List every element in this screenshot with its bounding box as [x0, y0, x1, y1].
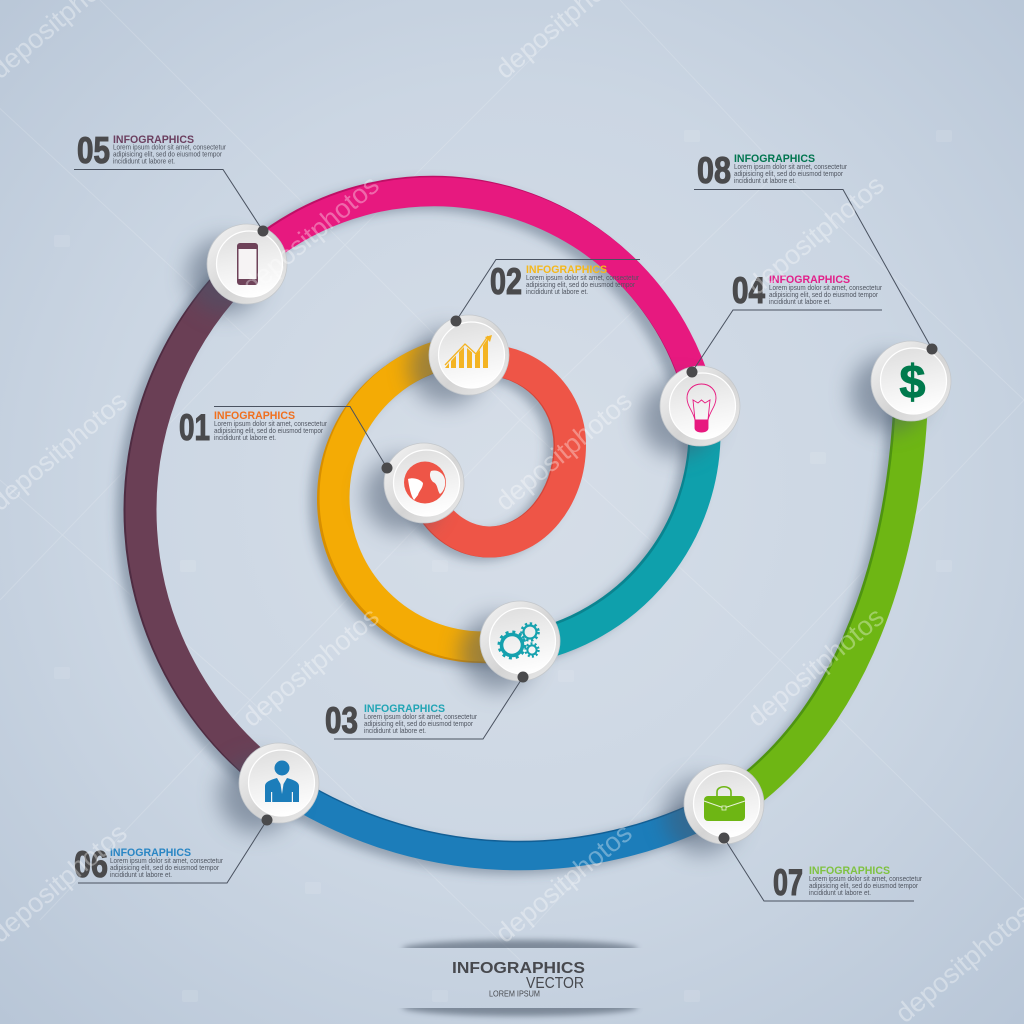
number 08: 08 [697, 150, 731, 191]
body 04: incididunt ut labore et. [769, 297, 831, 306]
number 07: 07 [773, 862, 803, 903]
node 05: phone [187, 224, 287, 314]
body 08: Lorem ipsum dolor sit amet, consectetur [734, 162, 847, 171]
label 07 [773, 862, 922, 903]
body 05: incididunt ut labore et. [113, 156, 175, 166]
body 08 [734, 162, 847, 185]
watermark: depositphotos [237, 602, 385, 733]
icon: businessman [265, 760, 299, 802]
footer shadow top [400, 936, 640, 948]
footer shadow bottom [400, 1008, 640, 1020]
label 06 [74, 844, 223, 885]
number 02: 02 [490, 261, 522, 302]
node 02: chart [409, 315, 509, 405]
watermark: depositphotos [742, 602, 890, 733]
body 06 [110, 856, 223, 879]
icon: briefcase [704, 787, 745, 821]
node 04: bulb [640, 366, 740, 456]
body 06: incididunt ut labore et. [110, 870, 172, 879]
leader lines [74, 170, 932, 901]
body 06: adipisicing elit, sed do eiusmod tempor [110, 863, 219, 872]
icon: smartphone [237, 243, 258, 285]
footer subheading: VECTOR [526, 975, 584, 992]
body 07: adipisicing elit, sed do eiusmod tempor [809, 881, 918, 890]
label 03 [325, 700, 477, 741]
label 08 [697, 150, 847, 191]
footer title block [452, 960, 585, 998]
icon: gears [499, 623, 539, 658]
heading 07: INFOGRAPHICS [809, 865, 890, 877]
band shadow [131, 195, 902, 860]
body 04: adipisicing elit, sed do eiusmod tempor [769, 290, 878, 299]
body 01: incididunt ut labore et. [214, 433, 276, 442]
node 06: person [219, 743, 319, 833]
label 02 [490, 261, 639, 302]
number 05: 05 [77, 130, 110, 171]
heading 01: INFOGRAPHICS [214, 410, 295, 422]
heading 08: INFOGRAPHICS [734, 153, 815, 165]
body 03 [364, 712, 477, 735]
band: orange [332, 348, 521, 650]
body 08: incididunt ut labore et. [734, 176, 796, 185]
body 07 [809, 874, 922, 897]
node 03: gears [460, 601, 560, 691]
body 04: Lorem ipsum dolor sit amet, consectetur [769, 283, 882, 292]
body 05: adipisicing elit, sed do eiusmod tempor [113, 150, 222, 158]
band: teal [508, 408, 706, 650]
label 01 [179, 407, 327, 448]
footer heading: INFOGRAPHICS [452, 960, 585, 977]
body 02: Lorem ipsum dolor sit amet, consectetur [526, 273, 639, 282]
number 06: 06 [74, 844, 108, 885]
icon: growth chart [445, 335, 492, 368]
body 05 [113, 142, 226, 166]
label 05 [77, 130, 226, 171]
body 02: incididunt ut labore et. [526, 287, 588, 296]
band: maroon [139, 264, 280, 783]
body 04 [769, 283, 882, 306]
watermark: depositphotos [490, 818, 638, 949]
icon: dollar sign: $ [899, 355, 926, 408]
body 07: incididunt ut labore et. [809, 888, 871, 897]
number 03: 03 [325, 700, 358, 741]
band: magenta [246, 190, 700, 396]
icon: globe [404, 462, 446, 504]
body 08: adipisicing elit, sed do eiusmod tempor [734, 169, 843, 178]
band: red [427, 358, 570, 542]
connector dots [258, 226, 938, 844]
number 04: 04 [732, 270, 765, 311]
body 06: Lorem ipsum dolor sit amet, consectetur [110, 856, 223, 865]
heading 02: INFOGRAPHICS [526, 264, 607, 276]
body 01: Lorem ipsum dolor sit amet, consectetur [214, 419, 327, 428]
body 01 [214, 419, 327, 442]
spiral bands [131, 190, 912, 860]
heading 03: INFOGRAPHICS [364, 703, 445, 715]
body 03: adipisicing elit, sed do eiusmod tempor [364, 719, 473, 728]
heading 06: INFOGRAPHICS [110, 847, 191, 859]
node 01: globe [364, 443, 464, 533]
band: green [722, 380, 912, 812]
watermark: depositphotos [742, 170, 890, 301]
body 03: incididunt ut labore et. [364, 726, 426, 735]
body 03: Lorem ipsum dolor sit amet, consectetur [364, 712, 477, 721]
body 02 [526, 273, 639, 296]
body 05: Lorem ipsum dolor sit amet, consectetur [113, 142, 226, 152]
body 07: Lorem ipsum dolor sit amet, consectetur [809, 874, 922, 883]
heading 04: INFOGRAPHICS [769, 274, 850, 286]
node 07: briefcase [664, 764, 764, 854]
heading 05: INFOGRAPHICS [113, 134, 194, 146]
number 01: 01 [179, 407, 210, 448]
icon: light bulb [687, 384, 716, 432]
footer caption: LOREM IPSUM [489, 988, 540, 998]
body 02: adipisicing elit, sed do eiusmod tempor [526, 280, 635, 289]
watermark: depositphotos [237, 170, 385, 301]
label 04 [732, 270, 882, 311]
node 08: dollar [851, 341, 951, 431]
watermark: depositphotos [490, 386, 638, 517]
band: blue [279, 782, 724, 856]
body 01: adipisicing elit, sed do eiusmod tempor [214, 426, 323, 435]
